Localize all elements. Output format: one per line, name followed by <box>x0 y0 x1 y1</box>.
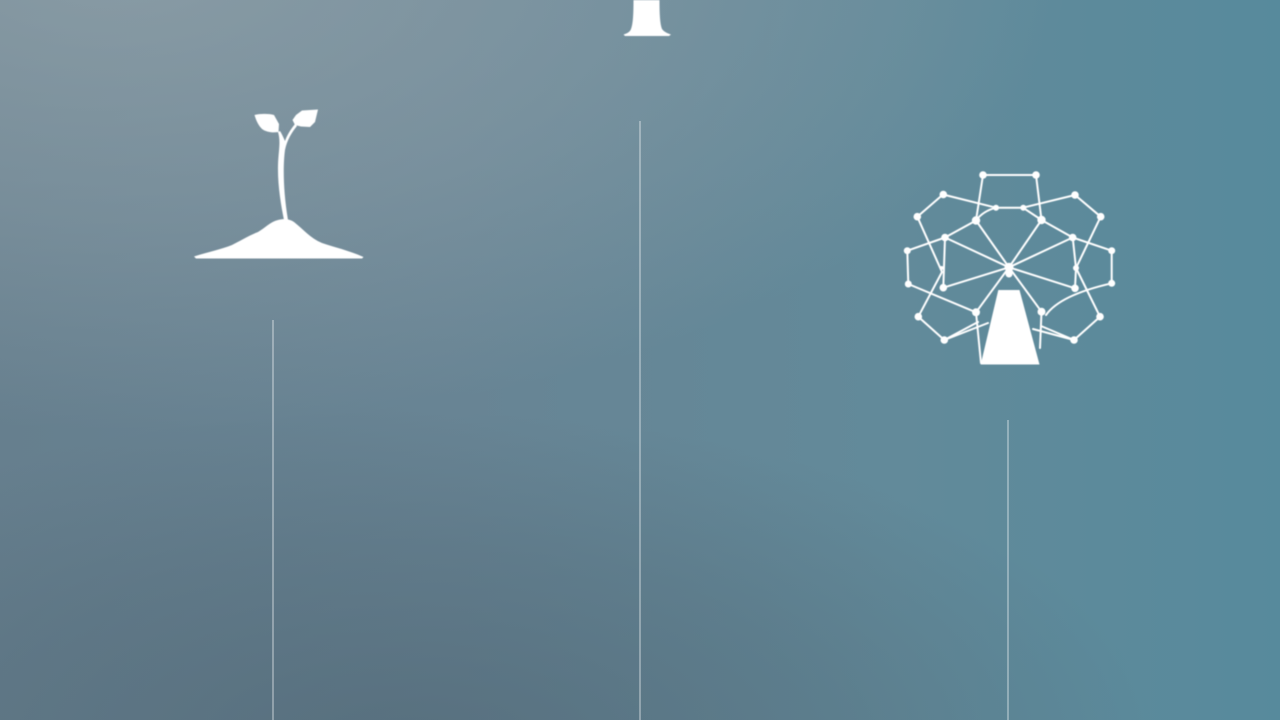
icon: sprout on soil mound <box>194 110 364 258</box>
stem <box>278 124 297 220</box>
vertical line: right stage <box>1007 420 1009 720</box>
soil mound <box>194 219 364 258</box>
icon: ferris wheel <box>904 171 1115 364</box>
icon: tower base cropped at top <box>624 0 671 36</box>
left leaf <box>254 114 279 132</box>
vertical line: centre stage <box>639 121 641 720</box>
wheel nodes <box>904 171 1115 344</box>
wheel base <box>981 290 1040 364</box>
vertical line: left stage <box>272 320 274 720</box>
wheel frame <box>907 175 1112 363</box>
right leaf <box>292 110 318 127</box>
